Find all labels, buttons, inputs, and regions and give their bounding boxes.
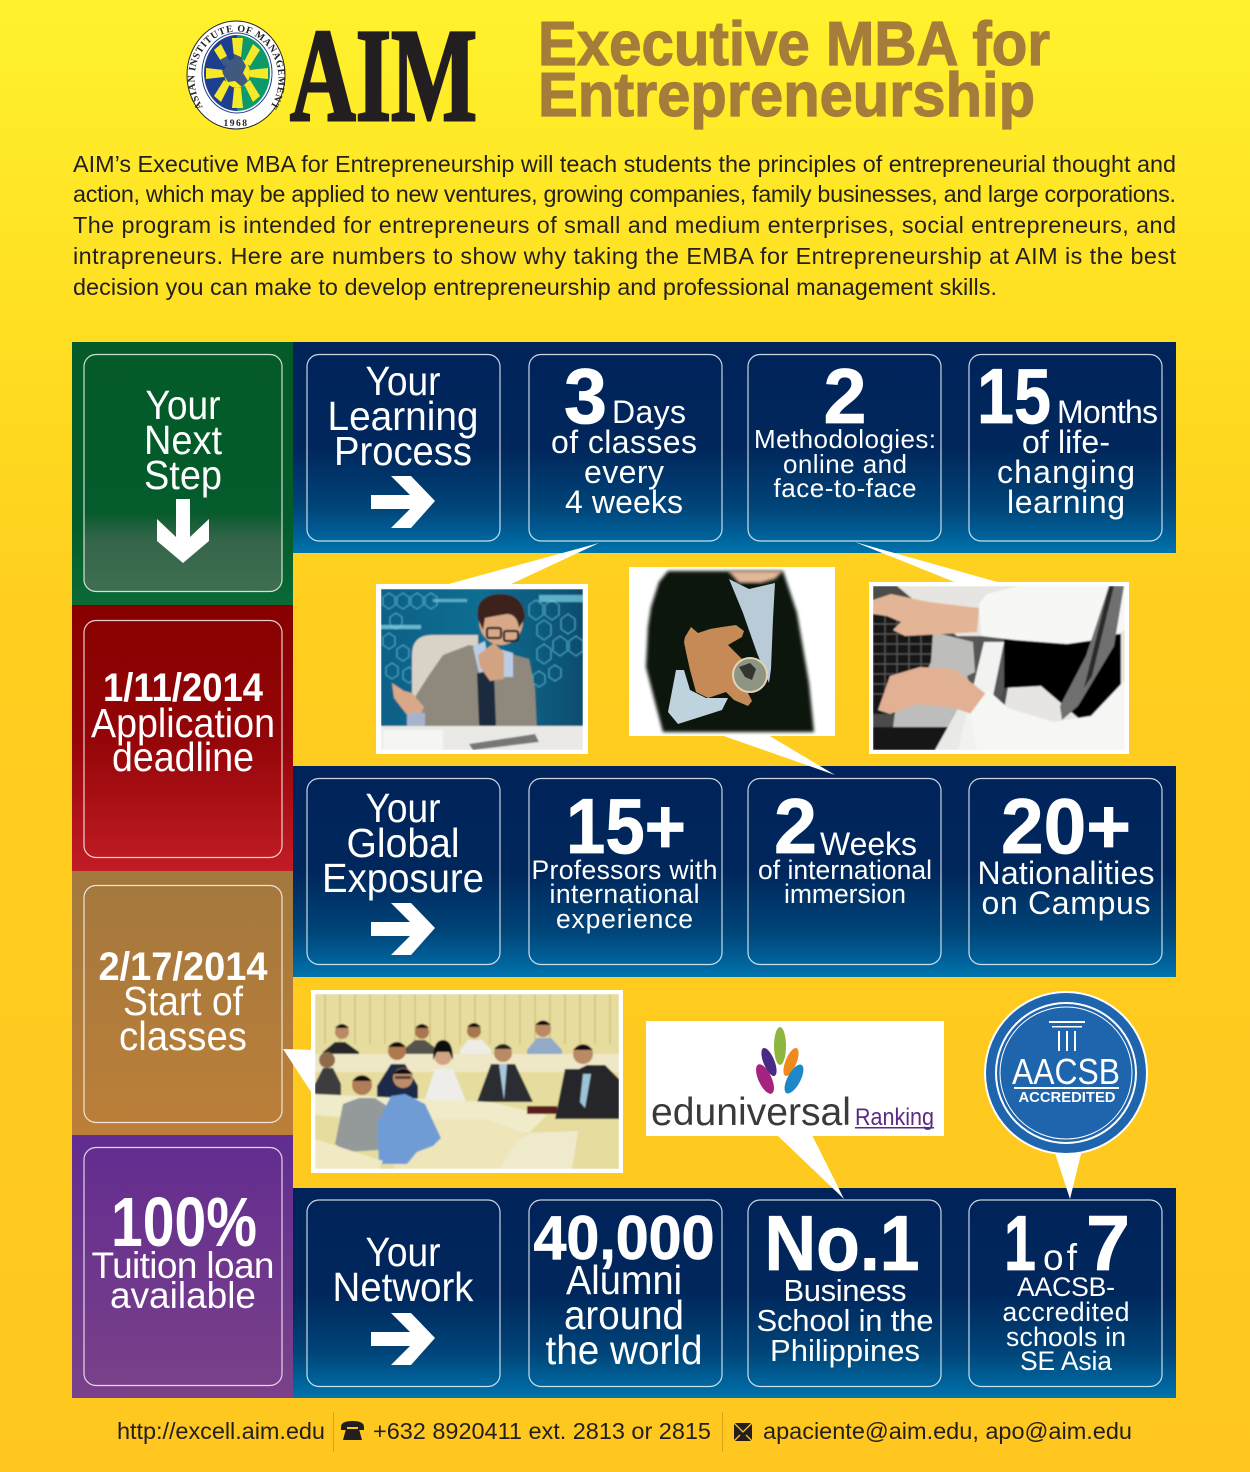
card: 40,000 alumni [529, 1200, 722, 1386]
card: 20+ nationalities: Nationalities [978, 855, 1154, 891]
panel: your next step: Your [146, 382, 220, 428]
card: 20+ nationalities: on Campus [982, 885, 1150, 921]
callout pointer: methodologies to laptop photo [855, 542, 1001, 583]
photo: hand holding globe [629, 567, 835, 736]
card: no.1 business school: School in the [756, 1303, 934, 1338]
card: 2 weeks: 2 [774, 782, 817, 870]
card: no.1 business school: Business [784, 1273, 906, 1308]
card: 15 months: learning [1007, 484, 1125, 520]
email addresses: apaciente@aim.edu, apo@aim.edu [763, 1418, 1132, 1444]
intro paragraph: AIM’s Executive MBA for Entrepreneurship will teach students the principles of entrepreneurial thought and [73, 151, 1176, 177]
phone number: +632 8920411 ext. 2813 or 2815 [373, 1418, 711, 1444]
card: 2 methodologies [748, 352, 941, 541]
card: 15+ professors: 15+ [566, 782, 686, 870]
logo: AACSB accredited badge: ACCREDITED [1018, 1090, 1116, 1106]
intro paragraph [73, 151, 1176, 300]
card: 3 days of classes: 3 [564, 352, 607, 440]
card: 15 months: changing [997, 454, 1135, 490]
title [538, 10, 1050, 130]
card: your global exposure [307, 778, 500, 964]
logo: AACSB accredited badge [984, 991, 1148, 1155]
intro paragraph: decision you can make to develop entrepreneurship and professional management skills. [73, 274, 997, 300]
card: 2 weeks: of international [758, 855, 932, 885]
photo: executive thinking [376, 584, 588, 754]
card: 3 days of classes: of classes [551, 424, 697, 460]
card: 15 months [969, 352, 1162, 541]
card: 3 days of classes: Days [612, 394, 686, 430]
panel: tuition loan: available [110, 1275, 256, 1316]
callout pointer: 3 days to photo [445, 543, 599, 585]
card: your global exposure: Your [366, 785, 440, 831]
card: 15+ professors: Professors with [532, 855, 718, 885]
card: your network [307, 1200, 500, 1386]
card: your learning process: Process [334, 428, 472, 474]
panel: application deadline: Application [91, 700, 275, 746]
card: no.1 business school: No.1 [764, 1199, 920, 1287]
icon: leaves [752, 1027, 807, 1096]
card: 20+ nationalities: 20+ [1001, 782, 1131, 870]
logo: eduniversal ranking: Ranking [855, 1104, 934, 1131]
icon: Asian Institute of Management seal: ASIAN INSTITUTE OF MANAGEMENT [188, 25, 286, 110]
panel: start of classes [72, 871, 293, 1135]
title: Entrepreneurship [538, 61, 1035, 130]
card: 1 of 7 AACSB: accredited [1002, 1297, 1130, 1327]
panel: tuition loan [72, 1135, 293, 1398]
panel: tuition loan: Tuition loan [92, 1245, 274, 1286]
card: 1 of 7 AACSB [969, 1199, 1162, 1386]
card: 2 methodologies: Methodologies: [754, 424, 936, 454]
card: 1 of 7 AACSB: of [1043, 1237, 1078, 1278]
card: 2 weeks: immersion [784, 879, 906, 909]
card: 15 months: 15 [977, 352, 1051, 440]
card: 40,000 alumni: 40,000 [534, 1204, 714, 1273]
panel: your next step [72, 342, 293, 605]
callout pointer: eduniversal to no.1 [777, 1135, 844, 1199]
card: your network: Network [332, 1264, 474, 1310]
card: 2 methodologies: online and [783, 449, 907, 479]
card: 2 weeks [748, 778, 941, 964]
card: your global exposure: Exposure [322, 855, 484, 901]
card: your learning process [307, 354, 500, 541]
card: 3 days of classes: every [584, 454, 664, 490]
intro paragraph: The program is intended for entrepreneurs of small and medium enterprises, social entrepreneurs, and [73, 212, 1176, 238]
card: 15 months: of life- [1022, 424, 1110, 460]
card: 15 months: Months [1057, 394, 1158, 430]
panel: start of classes: 2/17/2014 [98, 945, 268, 989]
callout pointer: classroom to start of classes [283, 1049, 315, 1098]
intro paragraph: action, which may be applied to new ventures, growing companies, family businesses, and large corporations. [73, 181, 1176, 207]
card: 15+ professors [529, 778, 722, 964]
panel: start of classes: classes [119, 1013, 247, 1059]
panel: your global exposure band [293, 766, 1176, 977]
card: no.1 business school [748, 1199, 941, 1386]
website: http://excell.aim.edu [117, 1418, 325, 1444]
title: Executive MBA for [538, 10, 1050, 79]
card: your global exposure: Global [346, 820, 460, 866]
icon: telephone [341, 1421, 364, 1440]
card: 20+ nationalities [969, 778, 1162, 964]
card: 15+ professors: international [550, 879, 700, 909]
card: 1 of 7 AACSB: AACSB- [1017, 1272, 1115, 1302]
panel: tuition loan: 100% [111, 1183, 257, 1261]
card: 3 days of classes [529, 352, 722, 541]
photo: classroom group [311, 990, 623, 1173]
card: 15+ professors: experience [556, 904, 693, 934]
icon: envelope [734, 1423, 752, 1441]
card: 3 days of classes: 4 weeks [565, 484, 683, 520]
card: your learning process: Learning [328, 393, 478, 439]
callout pointer: globe photo to global band [721, 735, 835, 775]
card: 40,000 alumni: around [564, 1292, 684, 1338]
card: your learning process: Your [366, 358, 440, 404]
card: 1 of 7 AACSB: schools in [1006, 1322, 1126, 1352]
card: 1 of 7 AACSB: SE Asia [1020, 1346, 1112, 1376]
card: your network: Your [366, 1229, 440, 1275]
card: no.1 business school: Philippines [770, 1333, 920, 1368]
logo: AACSB accredited badge: AACSB [1012, 1051, 1120, 1092]
icon: Asian Institute of Management seal: 1968 [224, 119, 248, 129]
panel: your next step: Next [144, 417, 223, 463]
panel: application deadline: deadline [112, 734, 254, 780]
card: 1 of 7 AACSB: 7 [1086, 1199, 1130, 1287]
panel: start of classes: Start of [123, 978, 244, 1024]
card: 40,000 alumni: the world [546, 1327, 702, 1373]
logo: eduniversal ranking: eduniversal [651, 1091, 851, 1134]
panel: your learning process band [293, 342, 1176, 553]
panel: application deadline [72, 605, 293, 871]
footer contact bar [117, 1412, 1132, 1452]
card: 2 methodologies: 2 [824, 352, 866, 440]
intro paragraph: intrapreneurs. Here are numbers to show why taking the EMBA for Entrepreneurship at AIM is the best [73, 243, 1176, 269]
photo: hands on laptop [869, 582, 1129, 754]
logo: eduniversal ranking [646, 1021, 944, 1136]
card: 2 methodologies: face-to-face [774, 473, 916, 503]
panel: your next step: Step [144, 452, 222, 498]
callout pointer: AACSB to 1 of 7 [1054, 1150, 1082, 1199]
card: 40,000 alumni: Alumni [566, 1257, 682, 1303]
card: 2 weeks: Weeks [820, 826, 917, 862]
AIM wordmark: AIM [290, 1, 477, 149]
card: 1 of 7 AACSB: 1 [1004, 1199, 1036, 1287]
panel: your network band [293, 1188, 1176, 1398]
panel: application deadline: 1/11/2014 [103, 666, 264, 710]
